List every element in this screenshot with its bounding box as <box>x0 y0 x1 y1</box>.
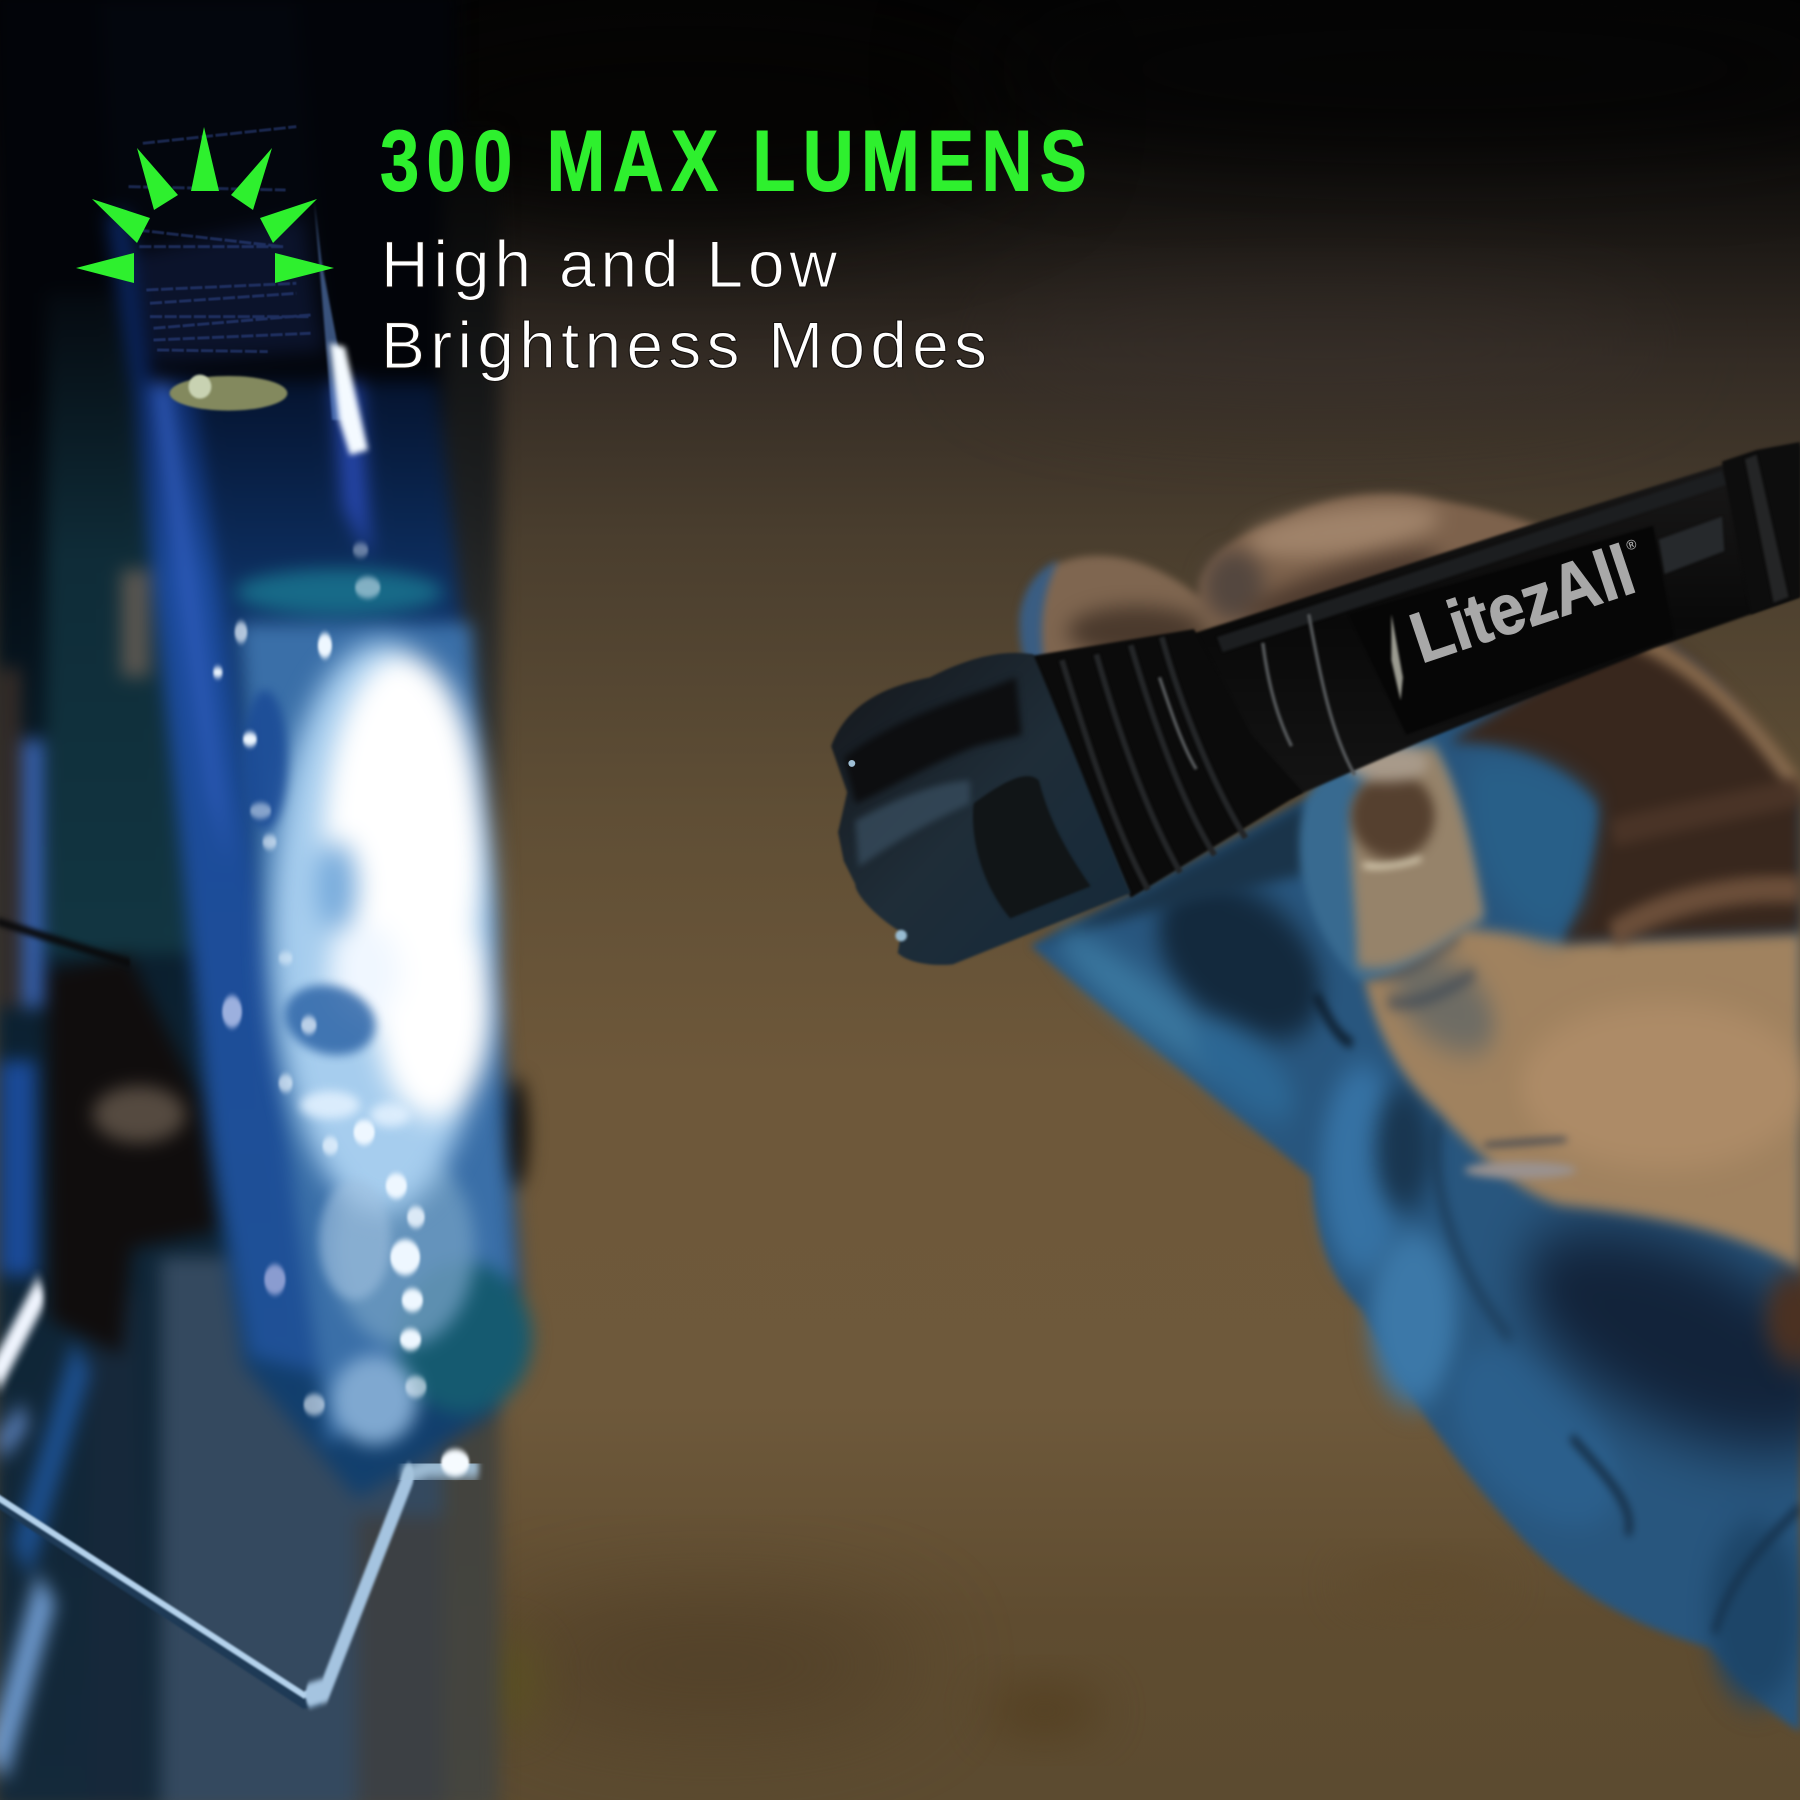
brand logo: LitezAll <box>1401 531 1644 679</box>
water droplets <box>213 543 427 1415</box>
thumb <box>1300 742 1485 981</box>
warm lit back of thumb <box>1357 911 1800 1268</box>
creases and folds <box>1316 995 1352 1044</box>
frame and hub in shadow <box>0 0 500 1800</box>
index finger <box>1019 556 1228 677</box>
label text, lines and highlights on upper tube <box>129 127 353 420</box>
softly focused bicycle frame and tube <box>0 0 532 1800</box>
lower tube body <box>132 382 532 1498</box>
flashlight <box>831 442 1800 965</box>
palm and lower fingers in blue light <box>1031 623 1800 1732</box>
upper tube <box>100 0 361 433</box>
rubber bezel head <box>831 653 1131 965</box>
white hot spot of the flashlight beam <box>271 641 493 1213</box>
brand logo: ® <box>1624 536 1639 554</box>
subheading: High and Low <box>381 227 837 301</box>
subheading <box>381 227 987 382</box>
middle finger <box>1199 494 1544 631</box>
blue patch between thumb and fingers <box>1469 758 1597 939</box>
knuckle of second finger <box>1321 1065 1403 1275</box>
bright edge highlight on tube <box>330 343 368 455</box>
flashlight body tube <box>1182 445 1800 798</box>
threaded neck <box>1027 629 1303 898</box>
hand gripping the flashlight <box>1019 494 1800 1732</box>
heading: 300 MAX LUMENS <box>380 113 1087 209</box>
bike rack wire and spokes <box>0 922 475 1702</box>
dark shadow band across hand <box>1503 1180 1800 1497</box>
icon: green light burst <box>76 127 334 283</box>
shaded underside of finger <box>1140 846 1340 1074</box>
subheading: Brightness Modes <box>381 308 987 382</box>
blotchy light patches on the tube <box>243 690 410 1300</box>
upper right shaded knuckles <box>1449 623 1800 942</box>
